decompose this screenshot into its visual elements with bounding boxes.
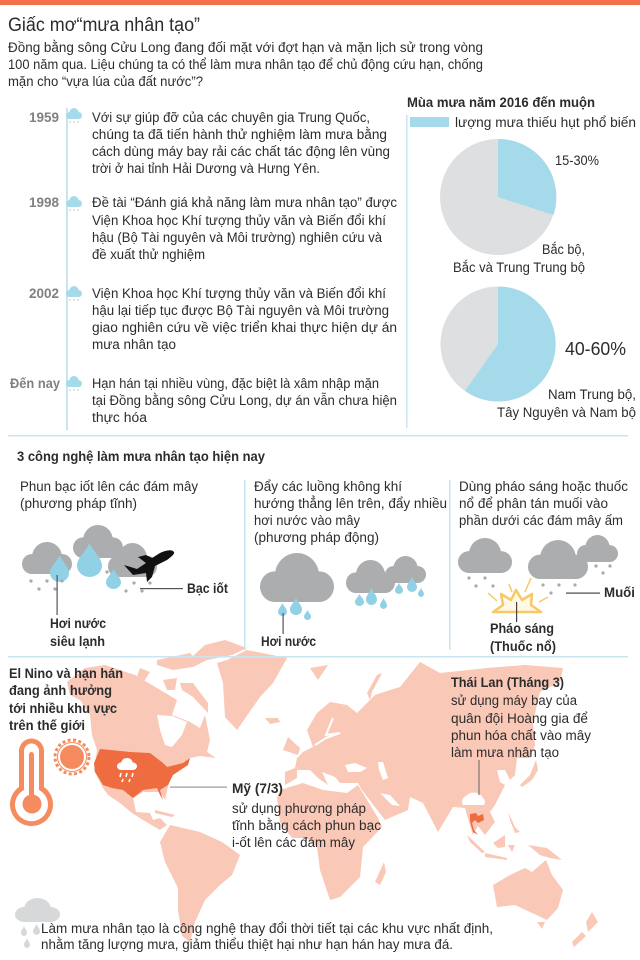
icon: grey rain cloud xyxy=(15,898,60,948)
callout: Thailand: phun hóa chất vào mây xyxy=(451,728,591,743)
static text: (phương pháp tĩnh) xyxy=(20,496,137,511)
Australia xyxy=(493,860,563,929)
intro text: 100 năm qua. Liệu chúng ta có thể làm mưa nhân tạo để chủ động cứu hạn, chống xyxy=(8,57,483,72)
panel: dynamic seeding xyxy=(254,479,447,649)
El Nino heading: trên thế giới xyxy=(9,718,85,733)
timeline entry: 2002: Viện Khoa học Khí tượng thủy văn và Biến đổi khí xyxy=(92,286,386,301)
hygroscopic text xyxy=(459,479,628,528)
Southeast Asia islands xyxy=(467,812,562,860)
dynamic text xyxy=(254,479,447,545)
Arctic islands xyxy=(137,640,247,713)
map highlight: USA xyxy=(94,749,190,800)
El Nino heading: El Nino và hạn hán xyxy=(9,666,123,681)
callout: Thailand: quân đội Hoàng gia để xyxy=(451,711,588,726)
icon: thermometer xyxy=(10,738,53,826)
dynamic text: hơi nước vào mây xyxy=(254,513,360,528)
timeline entry: 1998 xyxy=(29,195,397,262)
Greenland xyxy=(217,650,287,730)
timeline entry: 2002 xyxy=(29,286,397,352)
label: supercooled water vapour: siêu lạnh xyxy=(50,634,105,649)
pie chart: south xyxy=(440,286,556,402)
label 40-60%: 40-60% xyxy=(565,339,626,359)
world map xyxy=(67,640,598,947)
timeline entry: 1959: chúng ta đã tiến hành thử nghiệm làm mưa bằng xyxy=(92,127,387,142)
timeline entry: 1959: Với sự giúp đỡ của các chuyên gia Trung Quốc, xyxy=(92,110,370,125)
technologies heading: 3 công nghệ làm mưa nhân tạo hiện nay xyxy=(17,448,265,464)
label north regions: Bắc bộ, xyxy=(542,242,585,257)
timeline xyxy=(10,108,397,430)
timeline entry: 1959 xyxy=(29,108,390,176)
callout: USA: Mỹ (7/3) xyxy=(232,781,283,796)
dynamic text: (phương pháp động) xyxy=(254,530,379,545)
icon: rain cloud on USA xyxy=(117,758,137,782)
icon: sun xyxy=(55,740,89,774)
label: flare: Pháo sáng xyxy=(490,621,554,636)
top bar xyxy=(0,0,640,5)
label: salt xyxy=(566,585,635,600)
panel: static seeding xyxy=(20,479,228,649)
callout: Thailand xyxy=(451,675,591,795)
clouds and droplets xyxy=(22,525,157,593)
legend: lượng mưa thiếu hụt phổ biến xyxy=(455,115,636,130)
Cuba xyxy=(155,810,175,817)
timeline entry: 1998: Viện Khoa học Khí tượng thủy văn và Biến đổi khí xyxy=(92,213,386,228)
timeline entry: 1998: Đề tài “Đánh giá khả năng làm mưa nhân tạo” được xyxy=(92,195,397,210)
label: supercooled water vapour xyxy=(50,575,106,649)
label: salt: Muối xyxy=(604,585,635,600)
timeline entry: Đến nay: Đến nay xyxy=(10,376,60,391)
panel: rainy season pies xyxy=(406,95,636,428)
label: flare: (Thuốc nổ) xyxy=(490,639,556,654)
callout: USA: tĩnh bằng cách phun bạc xyxy=(232,818,381,833)
El Nino heading: đang ảnh hưởng xyxy=(9,683,112,698)
callout: Thailand: làm mưa nhân tạo xyxy=(451,745,559,760)
clouds and salt xyxy=(458,535,618,595)
panel: hygroscopic seeding xyxy=(458,479,635,654)
timeline entry: 1998: đề xuất thử nghiệm xyxy=(92,247,205,262)
footer note: nhằm tăng lượng mưa, giảm thiểu thiệt hại như hạn hán hay mưa đá. xyxy=(41,937,453,952)
pie chart: north xyxy=(440,139,556,255)
map inland seas xyxy=(157,715,485,806)
Madagascar xyxy=(375,862,386,885)
label: silver iodide: Bạc iốt xyxy=(187,581,228,596)
timeline entry: 1959: trời ở hai tỉnh Hải Dương và Hưng Yên. xyxy=(92,161,320,176)
timeline entry: 1998: 1998 xyxy=(29,195,59,210)
callout: USA: sử dụng phương pháp xyxy=(232,801,366,816)
label: silver iodide xyxy=(140,581,228,596)
title: Giấc mơ“mưa nhân tạo” xyxy=(8,15,200,36)
dynamic text: hướng thẳng lên trên, đẩy nhiều xyxy=(254,496,447,511)
hygroscopic text: Dùng pháo sáng hoặc thuốc xyxy=(459,479,628,494)
footer note xyxy=(41,921,493,952)
hygroscopic text: nổ để phân tán muối vào xyxy=(459,496,608,511)
label 15-30%: 15-30% xyxy=(555,153,599,168)
static text xyxy=(20,479,198,511)
label south regions xyxy=(497,387,636,420)
timeline entry: Đến nay xyxy=(10,376,397,425)
timeline entry: Đến nay: tại Đồng bằng sông Cửu Long, dự án vẫn chưa hiện xyxy=(92,393,397,408)
Iceland, Svalbard, Novaya Zemlya, UK xyxy=(265,665,382,755)
callout: USA xyxy=(170,781,381,850)
South America xyxy=(160,825,240,942)
El Nino heading: tới nhiều khu vực xyxy=(9,701,117,716)
label south regions: Tây Nguyên và Nam bộ xyxy=(497,405,636,420)
label north regions xyxy=(453,242,585,275)
North America xyxy=(67,665,216,830)
icon: airplane xyxy=(124,550,174,582)
timeline entry: 2002: 2002 xyxy=(29,286,59,301)
label: supercooled water vapour: Hơi nước xyxy=(50,616,106,631)
static text: Phun bạc iốt lên các đám mây xyxy=(20,479,198,494)
timeline entry: 1998: hậu (Bộ Tài nguyên và Môi trường) nghiên cứu và xyxy=(92,230,382,245)
map highlight: Thailand xyxy=(470,813,484,835)
Japan xyxy=(520,760,538,787)
timeline entry: 2002: mưa nhân tạo xyxy=(92,337,176,352)
callout: USA: i-ốt lên các đám mây xyxy=(232,835,355,850)
callout: Thailand: sử dụng máy bay của xyxy=(451,693,577,708)
timeline entry: 2002: giao nghiên cứu về việc triển khai thực hiện dự án xyxy=(92,320,397,335)
intro text: Đồng bằng sông Cửu Long đang đối mặt với đợt hạn và mặn lịch sử trong vòng xyxy=(8,40,483,55)
pies heading: Mùa mưa năm 2016 đến muộn xyxy=(407,95,595,110)
El Nino heading xyxy=(9,666,123,733)
footer note: Làm mưa nhân tạo là công nghệ thay đổi thời tiết tại các khu vực nhất định, xyxy=(41,921,493,936)
callout: Thailand: Thái Lan (Tháng 3) xyxy=(451,675,564,690)
New Zealand xyxy=(572,912,598,947)
label south regions: Nam Trung bộ, xyxy=(548,387,636,402)
timeline entry: 1959: cách dùng máy bay rải các chất tác động lên vùng xyxy=(92,144,390,159)
label north regions: Bắc và Trung Trung bộ xyxy=(453,260,585,275)
intro text xyxy=(8,40,483,89)
hygroscopic text: phần dưới các đám mây ấm xyxy=(459,513,623,528)
dynamic text: Đẩy các luồng không khí xyxy=(254,479,402,494)
timeline entry: 2002: hậu lại tiếp tục được Bộ Tài nguyên và Môi trường xyxy=(92,303,389,318)
timeline entry: Đến nay: Hạn hán tại nhiều vùng, đặc biệt là xâm nhập mặn xyxy=(92,376,379,391)
label: water vapour: Hơi nước xyxy=(261,634,316,649)
timeline entry: Đến nay: thực hóa xyxy=(92,410,148,425)
label: water vapour xyxy=(261,613,316,649)
icon: flare explosion xyxy=(488,578,548,612)
clouds and droplets xyxy=(260,553,426,620)
intro text: mặn cho “vựa lúa của đất nước”? xyxy=(8,74,203,89)
Africa xyxy=(277,783,382,900)
label: flare xyxy=(490,602,556,654)
timeline entry: 1959: 1959 xyxy=(29,110,59,125)
Eurasia xyxy=(285,662,563,835)
